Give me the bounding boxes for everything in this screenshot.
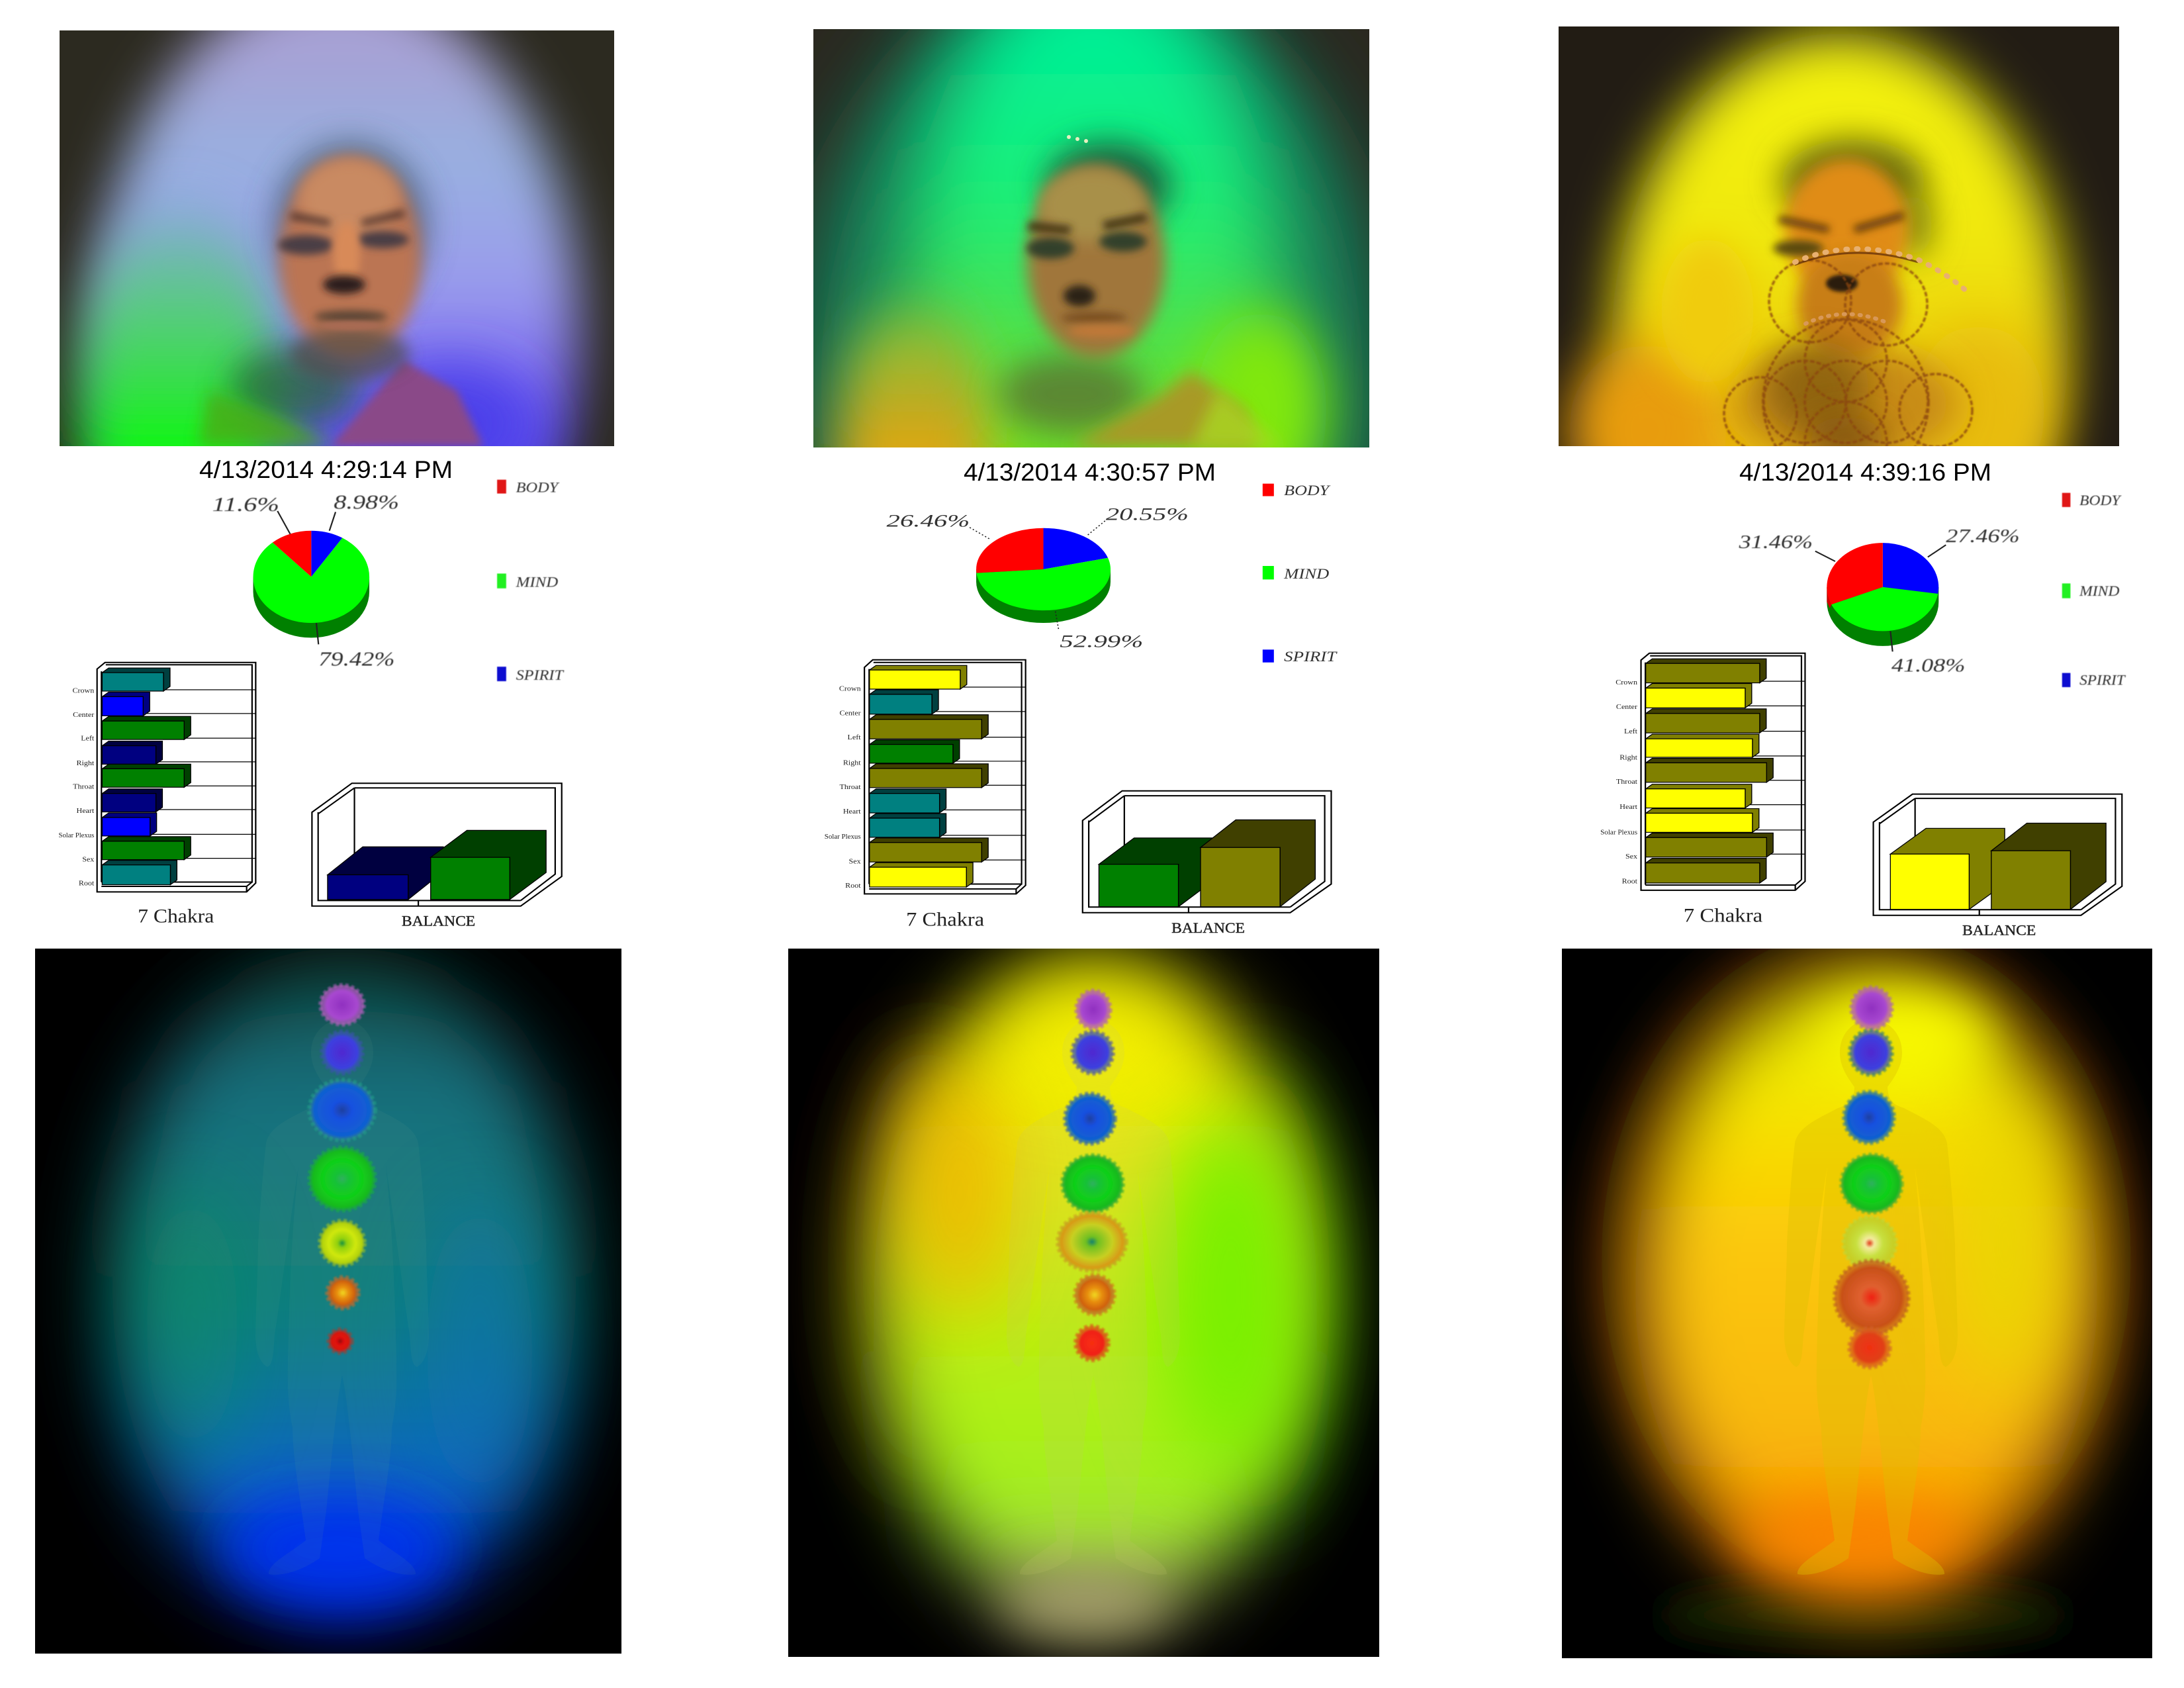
pie chart: body mind spirit: 52.99% bbox=[1060, 632, 1143, 651]
body scan: blue aura with chakras bbox=[35, 949, 621, 1654]
bar chart: 7 chakra bbox=[825, 660, 1026, 930]
bar chart: 7 chakra: Solar Plexus bbox=[1600, 829, 1638, 836]
bar chart: 7 chakra: Right bbox=[76, 759, 95, 767]
bar chart: 7 chakra: Root bbox=[79, 880, 95, 887]
panel: reading 3 (4:39:16 PM, yellow) bbox=[1559, 26, 2152, 1658]
pie chart: body mind spirit bbox=[887, 505, 1189, 651]
bar chart: 7 chakra: 7 Chakra bbox=[1684, 904, 1762, 926]
bar chart: 7 chakra: 7 Chakra bbox=[906, 908, 984, 930]
legend bbox=[2062, 492, 2126, 688]
bar chart: 7 chakra: Right bbox=[1619, 754, 1638, 761]
crystal grid lines bbox=[1724, 260, 1972, 485]
bar chart: 7 chakra: Solar Plexus bbox=[59, 831, 95, 839]
legend: SPIRIT bbox=[2079, 672, 2126, 688]
human silhouette bbox=[1784, 1019, 1958, 1575]
legend: MIND bbox=[1283, 565, 1330, 582]
legend: BODY bbox=[1284, 482, 1331, 498]
bar chart: 7 chakra: Sex bbox=[1625, 853, 1637, 861]
bar chart: 7 chakra: Sex bbox=[82, 856, 95, 863]
date stamp: 4/13/2014 4:39:16 PM bbox=[1739, 459, 1991, 486]
date stamp: 4/13/2014 4:29:14 PM bbox=[199, 456, 453, 483]
bar chart: 7 chakra bbox=[1600, 653, 1805, 926]
pie chart: body mind spirit: 27.46% bbox=[1946, 526, 2020, 547]
legend: MIND bbox=[2079, 583, 2120, 599]
legend: BODY bbox=[2079, 492, 2122, 508]
aura report charts bbox=[1600, 492, 2126, 938]
pie chart: body mind spirit: 79.42% bbox=[318, 648, 394, 671]
photo: face with green aura bbox=[794, 0, 1390, 794]
legend: MIND bbox=[516, 573, 559, 590]
bar chart: 7 chakra: Root bbox=[1622, 878, 1638, 885]
panel: reading 2 (4:30:57 PM, green) bbox=[788, 0, 1390, 1657]
photo: face with violet and green aura bbox=[60, 30, 614, 446]
bar chart: 7 chakra: Heart bbox=[843, 808, 861, 816]
bar chart: 7 chakra: Crown bbox=[72, 687, 95, 694]
bar chart: balance bbox=[1083, 791, 1331, 936]
legend: BODY bbox=[516, 479, 560, 495]
bar chart: 7 chakra: Left bbox=[81, 735, 95, 742]
bar chart: 7 chakra: Right bbox=[843, 759, 861, 767]
bar chart: 7 chakra: 7 Chakra bbox=[138, 905, 214, 927]
pie chart: body mind spirit: 41.08% bbox=[1891, 655, 1965, 676]
human silhouette bbox=[1007, 1019, 1180, 1575]
aura report charts bbox=[825, 482, 1338, 936]
bar chart: 7 chakra: Crown bbox=[1615, 679, 1637, 686]
legend: SPIRIT bbox=[1284, 648, 1338, 665]
bar chart: 7 chakra: Throat bbox=[840, 784, 861, 791]
legend bbox=[1263, 482, 1338, 665]
bar chart: 7 chakra: Heart bbox=[1619, 804, 1638, 811]
bar chart: 7 chakra: Heart bbox=[77, 807, 95, 815]
chakra stack bbox=[309, 985, 375, 1353]
bar chart: 7 chakra: Sex bbox=[849, 858, 861, 865]
bar chart: 7 chakra: Solar Plexus bbox=[825, 833, 861, 841]
body scan: yellow-orange aura with chakras bbox=[1562, 927, 2152, 1658]
legend: SPIRIT bbox=[516, 667, 565, 683]
bar chart: 7 chakra bbox=[59, 663, 255, 927]
human silhouette bbox=[255, 1266, 428, 1574]
pie chart: body mind spirit: 20.55% bbox=[1106, 505, 1189, 524]
pie chart: body mind spirit: 8.98% bbox=[334, 491, 399, 514]
bar chart: 7 chakra: Root bbox=[845, 882, 861, 890]
pie chart: body mind spirit: 31.46% bbox=[1738, 531, 1813, 553]
chakra stack bbox=[1058, 990, 1126, 1360]
panel: reading 1 (4:29:14 PM, blue and green) bbox=[35, 0, 621, 1654]
bar chart: 7 chakra: Center bbox=[1616, 703, 1637, 711]
bar chart: balance bbox=[1874, 794, 2122, 938]
photo: face with yellow aura and crystal grid bbox=[1559, 26, 2119, 655]
aura report charts bbox=[59, 479, 565, 929]
pie chart: body mind spirit: 26.46% bbox=[887, 511, 970, 531]
bar chart: 7 chakra: Center bbox=[840, 710, 861, 717]
pie chart: body mind spirit: 11.6% bbox=[212, 493, 279, 516]
bar chart: 7 chakra: Left bbox=[848, 734, 861, 741]
legend bbox=[497, 479, 565, 683]
date stamp: 4/13/2014 4:30:57 PM bbox=[964, 459, 1216, 486]
bar chart: 7 chakra: Center bbox=[73, 711, 94, 719]
body scan: yellow-green aura with chakras bbox=[788, 949, 1379, 1657]
bar chart: balance: BALANCE bbox=[1962, 922, 2036, 938]
pie chart: body mind spirit bbox=[1738, 526, 2020, 676]
bar chart: balance: BALANCE bbox=[402, 913, 475, 929]
bar chart: balance: BALANCE bbox=[1171, 919, 1245, 936]
chakra stack bbox=[1835, 987, 1909, 1368]
bar chart: 7 chakra: Throat bbox=[1616, 778, 1638, 786]
pie chart: body mind spirit bbox=[212, 491, 399, 671]
bar chart: balance bbox=[312, 783, 562, 929]
bar chart: 7 chakra: Crown bbox=[839, 685, 861, 692]
bar chart: 7 chakra: Throat bbox=[73, 783, 95, 791]
bar chart: 7 chakra: Left bbox=[1624, 728, 1638, 735]
